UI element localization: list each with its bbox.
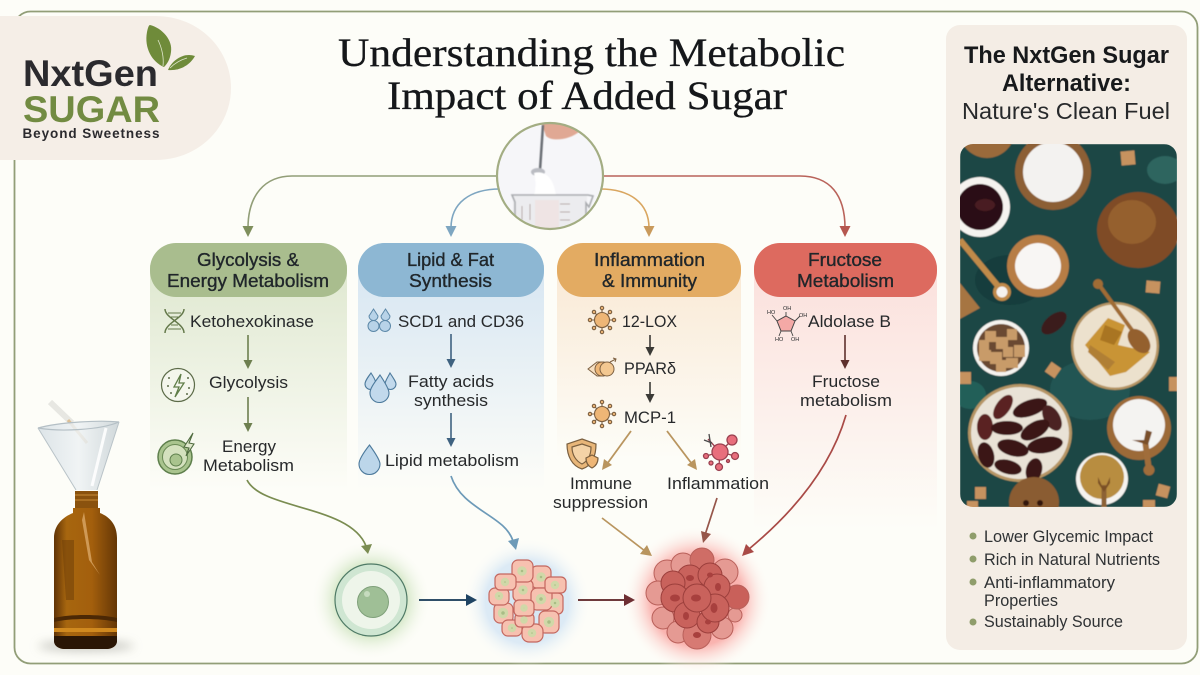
honeycomb plate xyxy=(1071,302,1159,390)
benefit: lower glycemic impact: Lower Glycemic Impact xyxy=(984,528,1153,546)
benefit: sustainably source: Sustainably Source xyxy=(984,613,1123,631)
panel: NxtGen sugar alternative xyxy=(946,25,1187,650)
logo wordmark SUGAR: SUGAR xyxy=(23,89,160,130)
panel body xyxy=(754,265,937,530)
logo badge background xyxy=(0,16,231,160)
icon: inflammation molecule xyxy=(704,434,738,470)
panel heading: Alternative: xyxy=(1002,70,1131,97)
panel header xyxy=(754,243,937,297)
panel header: Energy Metabolism xyxy=(167,270,329,291)
label: Energy Metabolism xyxy=(203,437,294,475)
title xyxy=(338,30,845,118)
label: Fatty acids synthesis: Fatty acids xyxy=(408,372,494,391)
icon: leaves xyxy=(146,25,195,70)
single date xyxy=(1041,311,1067,335)
icon: fructose ring: OH xyxy=(799,313,807,319)
arrow: lipid metabolism to proliferating cells xyxy=(451,476,519,550)
panel header: Inflammation xyxy=(594,249,705,270)
icon: DNA helix xyxy=(165,309,184,333)
panel: lipid and fat synthesis xyxy=(358,243,544,490)
amber bottle with funnel and dropper xyxy=(38,402,134,651)
benefit: anti-inflammatory: Anti-inflammatory xyxy=(984,574,1116,592)
icon: fructose ring: HO xyxy=(775,337,784,343)
panel header: Lipid & Fat xyxy=(407,249,494,270)
connector: to lipid panel xyxy=(446,189,500,237)
coconut sugar bowl xyxy=(1015,134,1091,210)
label: Fructose metabolism xyxy=(800,372,892,410)
title: Impact of Added Sugar xyxy=(387,73,787,118)
label: Energy Metabolism: Metabolism xyxy=(203,456,294,475)
panel body xyxy=(150,265,347,490)
coconut xyxy=(1097,192,1179,268)
panel heading xyxy=(962,42,1170,124)
icon: MCP-1 virus xyxy=(588,400,616,428)
label: Fructose metabolism: metabolism xyxy=(800,391,892,410)
label: Inflammation: Inflammation xyxy=(667,474,769,493)
arrow xyxy=(244,397,252,432)
panel header xyxy=(358,243,544,297)
arrow: to immune suppression xyxy=(602,431,631,470)
logo xyxy=(0,16,231,160)
cell stage: proliferating cells xyxy=(463,538,591,666)
arrow xyxy=(244,335,252,369)
arrow xyxy=(446,334,456,368)
icon: lipid drop xyxy=(359,445,380,474)
panel body xyxy=(557,265,741,460)
icon: fatty acid drops xyxy=(365,373,396,402)
label: Immune suppression xyxy=(553,474,648,512)
arrow xyxy=(446,413,456,447)
label: PPARδ: PPARδ xyxy=(624,359,676,378)
arrow: immune suppression to tumor xyxy=(602,518,652,556)
panel header: Glycolysis & xyxy=(197,249,300,270)
panel header xyxy=(557,243,741,297)
panel heading: Nature's Clean Fuel xyxy=(962,98,1170,124)
panel header: & Immunity xyxy=(602,270,698,291)
panel header: Metabolism xyxy=(797,270,894,291)
benefit: natural nutrients: Rich in Natural Nutrients xyxy=(984,551,1160,569)
connector: to inflammation panel xyxy=(600,189,654,237)
sugar wood bowl with scoop xyxy=(1107,396,1171,460)
wooden spoon xyxy=(960,240,998,286)
arrow: inflammation to tumor xyxy=(701,498,717,543)
loose sugar cubes xyxy=(960,150,1177,511)
sugar cube bowl xyxy=(973,320,1029,376)
panel header: Synthesis xyxy=(409,270,492,291)
small bowl xyxy=(964,144,1012,159)
label: Fatty acids synthesis: synthesis xyxy=(414,391,488,410)
label: Lipid metabolism: Lipid metabolism xyxy=(385,451,519,470)
icon: glass funnel xyxy=(38,421,119,490)
icon: immune shield xyxy=(567,439,598,469)
panel body xyxy=(358,265,544,490)
label: Energy Metabolism: Energy xyxy=(222,437,276,456)
panel header xyxy=(150,243,347,297)
panel: glycolysis and energy metabolism xyxy=(150,243,347,490)
dates plate xyxy=(968,384,1072,482)
label: Fatty acids synthesis xyxy=(408,372,494,410)
label: Fructose metabolism: Fructose xyxy=(812,372,880,391)
syrup bowl xyxy=(960,176,1011,238)
title: Understanding the Metabolic xyxy=(338,30,845,75)
cell stage: normal cell xyxy=(311,540,431,660)
label: Immune suppression: suppression xyxy=(553,493,648,512)
label: MCP-1: MCP-1 xyxy=(624,408,676,427)
icon: dropper xyxy=(50,402,87,443)
arrow xyxy=(646,382,654,403)
label: 12-LOX: 12-LOX xyxy=(622,312,677,331)
panel: inflammation and immunity xyxy=(553,243,769,512)
arrow: proliferating to tumor xyxy=(578,594,635,606)
bottle shadow xyxy=(38,641,134,651)
arrow xyxy=(840,335,850,369)
icon: 12-LOX virus xyxy=(588,306,616,334)
benefits list xyxy=(970,528,1160,631)
icon: fructose ring: HO xyxy=(767,310,776,316)
arrow: energy metabolism to cell xyxy=(247,480,372,554)
icon: energy cell xyxy=(158,433,194,474)
panel header: Fructose xyxy=(808,249,882,270)
icon: lipid droplets xyxy=(368,309,390,332)
label: Ketohexokinase: Ketohexokinase xyxy=(190,312,314,331)
panel background xyxy=(946,25,1187,650)
icon: fructose ring: OH xyxy=(791,337,799,343)
label: SCD1 and CD36: SCD1 and CD36 xyxy=(398,312,524,331)
arrow: to inflammation xyxy=(667,431,697,470)
icon: fructose ring xyxy=(767,306,807,343)
photo: natural sweeteners flat lay xyxy=(960,144,1177,507)
arrow: normal to proliferating xyxy=(419,594,477,606)
connector: to glycolysis panel xyxy=(242,176,500,237)
logo wordmark NxtGen: NxtGen xyxy=(23,53,158,94)
label: Immune suppression: Immune xyxy=(570,474,632,493)
label: Glycolysis: Glycolysis xyxy=(209,373,288,392)
bottom coconut xyxy=(1008,476,1060,507)
white bowl xyxy=(1007,235,1069,297)
connector: to fructose panel xyxy=(600,176,850,237)
icon: PPAR receptor xyxy=(588,358,616,376)
benefit: anti-inflammatory xyxy=(970,574,1116,610)
icon: glycolysis circle with bolt xyxy=(162,368,194,402)
icon: fructose ring: OH xyxy=(783,306,791,312)
cell stage: tumor mass xyxy=(623,526,771,674)
brown sugar bowl xyxy=(1076,453,1128,505)
arrow: fructose metabolism to tumor xyxy=(742,415,846,556)
panel: fructose metabolism xyxy=(754,243,937,530)
panel heading: The NxtGen Sugar xyxy=(964,42,1169,69)
logo tagline: Beyond Sweetness xyxy=(22,126,160,141)
arrow xyxy=(646,335,654,356)
central image: sugar poured into measuring cup xyxy=(497,118,603,232)
icon: bottle xyxy=(54,491,117,649)
benefit: anti-inflammatory: Properties xyxy=(984,592,1058,610)
label: Aldolase B: Aldolase B xyxy=(808,312,891,331)
